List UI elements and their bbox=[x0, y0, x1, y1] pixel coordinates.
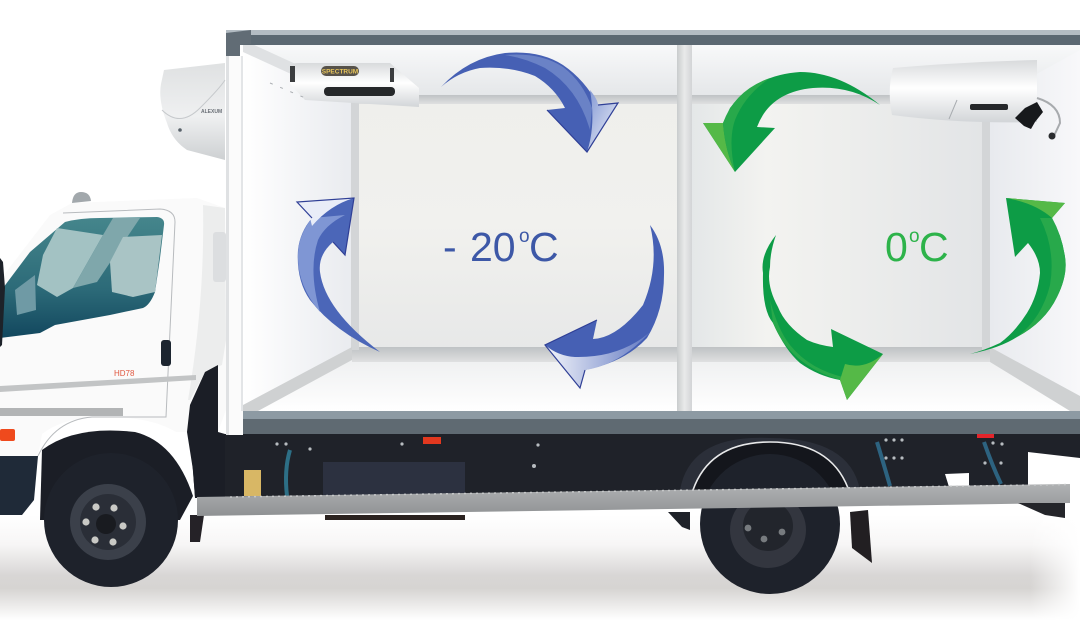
model name: HD78 bbox=[114, 369, 135, 378]
right seat reflection bbox=[110, 235, 162, 297]
left wall corner post bbox=[351, 100, 359, 350]
right wall corner post bbox=[982, 100, 990, 350]
brand badge: SPECTRUM bbox=[322, 68, 358, 76]
side step rail bbox=[197, 484, 1070, 516]
left side wall bbox=[243, 46, 352, 410]
door seam bbox=[38, 209, 175, 456]
cab bbox=[0, 192, 226, 515]
green arrow: top bbox=[703, 72, 880, 172]
temperature label: freezer: - bbox=[443, 224, 457, 270]
cab lower bumper bbox=[0, 456, 38, 515]
rear floor trim band bbox=[352, 347, 990, 362]
upper trim band bbox=[352, 95, 990, 104]
front evaporator unit bbox=[270, 63, 419, 107]
ground shadow bbox=[0, 515, 1080, 620]
rooftop refrigeration unit bbox=[160, 63, 225, 160]
side marker lamp left bbox=[423, 437, 441, 444]
roof beam bbox=[226, 30, 1080, 56]
rear chassis stub bbox=[1018, 503, 1065, 518]
body stripe bbox=[0, 375, 196, 392]
temperature label: chiller: 0 bbox=[885, 224, 908, 270]
green arrow: bottom bbox=[763, 235, 883, 400]
rear evaporator unit bbox=[890, 60, 1060, 140]
front mud flap bbox=[190, 515, 204, 542]
blue hose left bbox=[286, 450, 290, 496]
blue arrow: lower right bbox=[545, 225, 664, 388]
green arrow: right bbox=[970, 198, 1066, 354]
floor bbox=[243, 360, 1080, 411]
left floor rail bbox=[243, 347, 352, 411]
back wall: freezer compartment bbox=[352, 100, 677, 350]
rear cab panel bbox=[188, 205, 226, 400]
temperature label: freezer: 20 bbox=[470, 224, 516, 270]
ceiling bbox=[243, 44, 1080, 98]
filter canister bbox=[244, 470, 261, 496]
tank lower edge bbox=[325, 515, 465, 520]
side marker lamp right bbox=[977, 432, 994, 438]
door handle bbox=[161, 340, 171, 366]
compartment divider bbox=[677, 44, 692, 411]
blue hose right bbox=[984, 442, 1001, 484]
left seat reflection bbox=[37, 228, 103, 297]
temperature label: chiller: C bbox=[919, 224, 949, 270]
lower stripe bbox=[0, 408, 123, 416]
under-body fuel tank bbox=[323, 462, 465, 496]
brand badge bbox=[321, 66, 359, 76]
chassis frame bbox=[190, 432, 1080, 520]
temperature label: chiller: o bbox=[909, 226, 920, 247]
blue arrow: left bbox=[297, 198, 380, 352]
front wheel bbox=[40, 430, 193, 587]
rooftop refrigeration unit: ALEXUM bbox=[201, 109, 222, 115]
gap behind cab bbox=[187, 365, 225, 498]
right floor rail bbox=[990, 347, 1080, 411]
side mirror bbox=[0, 258, 5, 347]
orange side marker bbox=[0, 429, 15, 441]
windshield and side window bbox=[0, 217, 164, 338]
box floor beam bbox=[243, 411, 1080, 434]
left upper bevel bbox=[243, 44, 352, 102]
cargo box interior bbox=[243, 44, 1080, 411]
frame bolts bbox=[275, 438, 1004, 468]
rear wheel arch and wheel bbox=[668, 438, 860, 594]
blue hose middle bbox=[877, 442, 890, 486]
roof marker lamp bbox=[72, 192, 91, 203]
temperature label: freezer: o bbox=[519, 226, 530, 247]
pipe bracket bbox=[1015, 98, 1060, 140]
front bulkhead post bbox=[226, 56, 243, 435]
rear mud flap bbox=[850, 510, 872, 563]
back wall: chiller compartment bbox=[692, 100, 990, 350]
glass reflection strip bbox=[73, 218, 140, 288]
exposed white gaps in chassis bbox=[945, 473, 969, 487]
lower dashboard reflection bbox=[15, 275, 36, 315]
blue arrow: top bbox=[441, 52, 618, 152]
temperature label: freezer: C bbox=[529, 224, 559, 270]
right side wall bbox=[990, 50, 1080, 405]
